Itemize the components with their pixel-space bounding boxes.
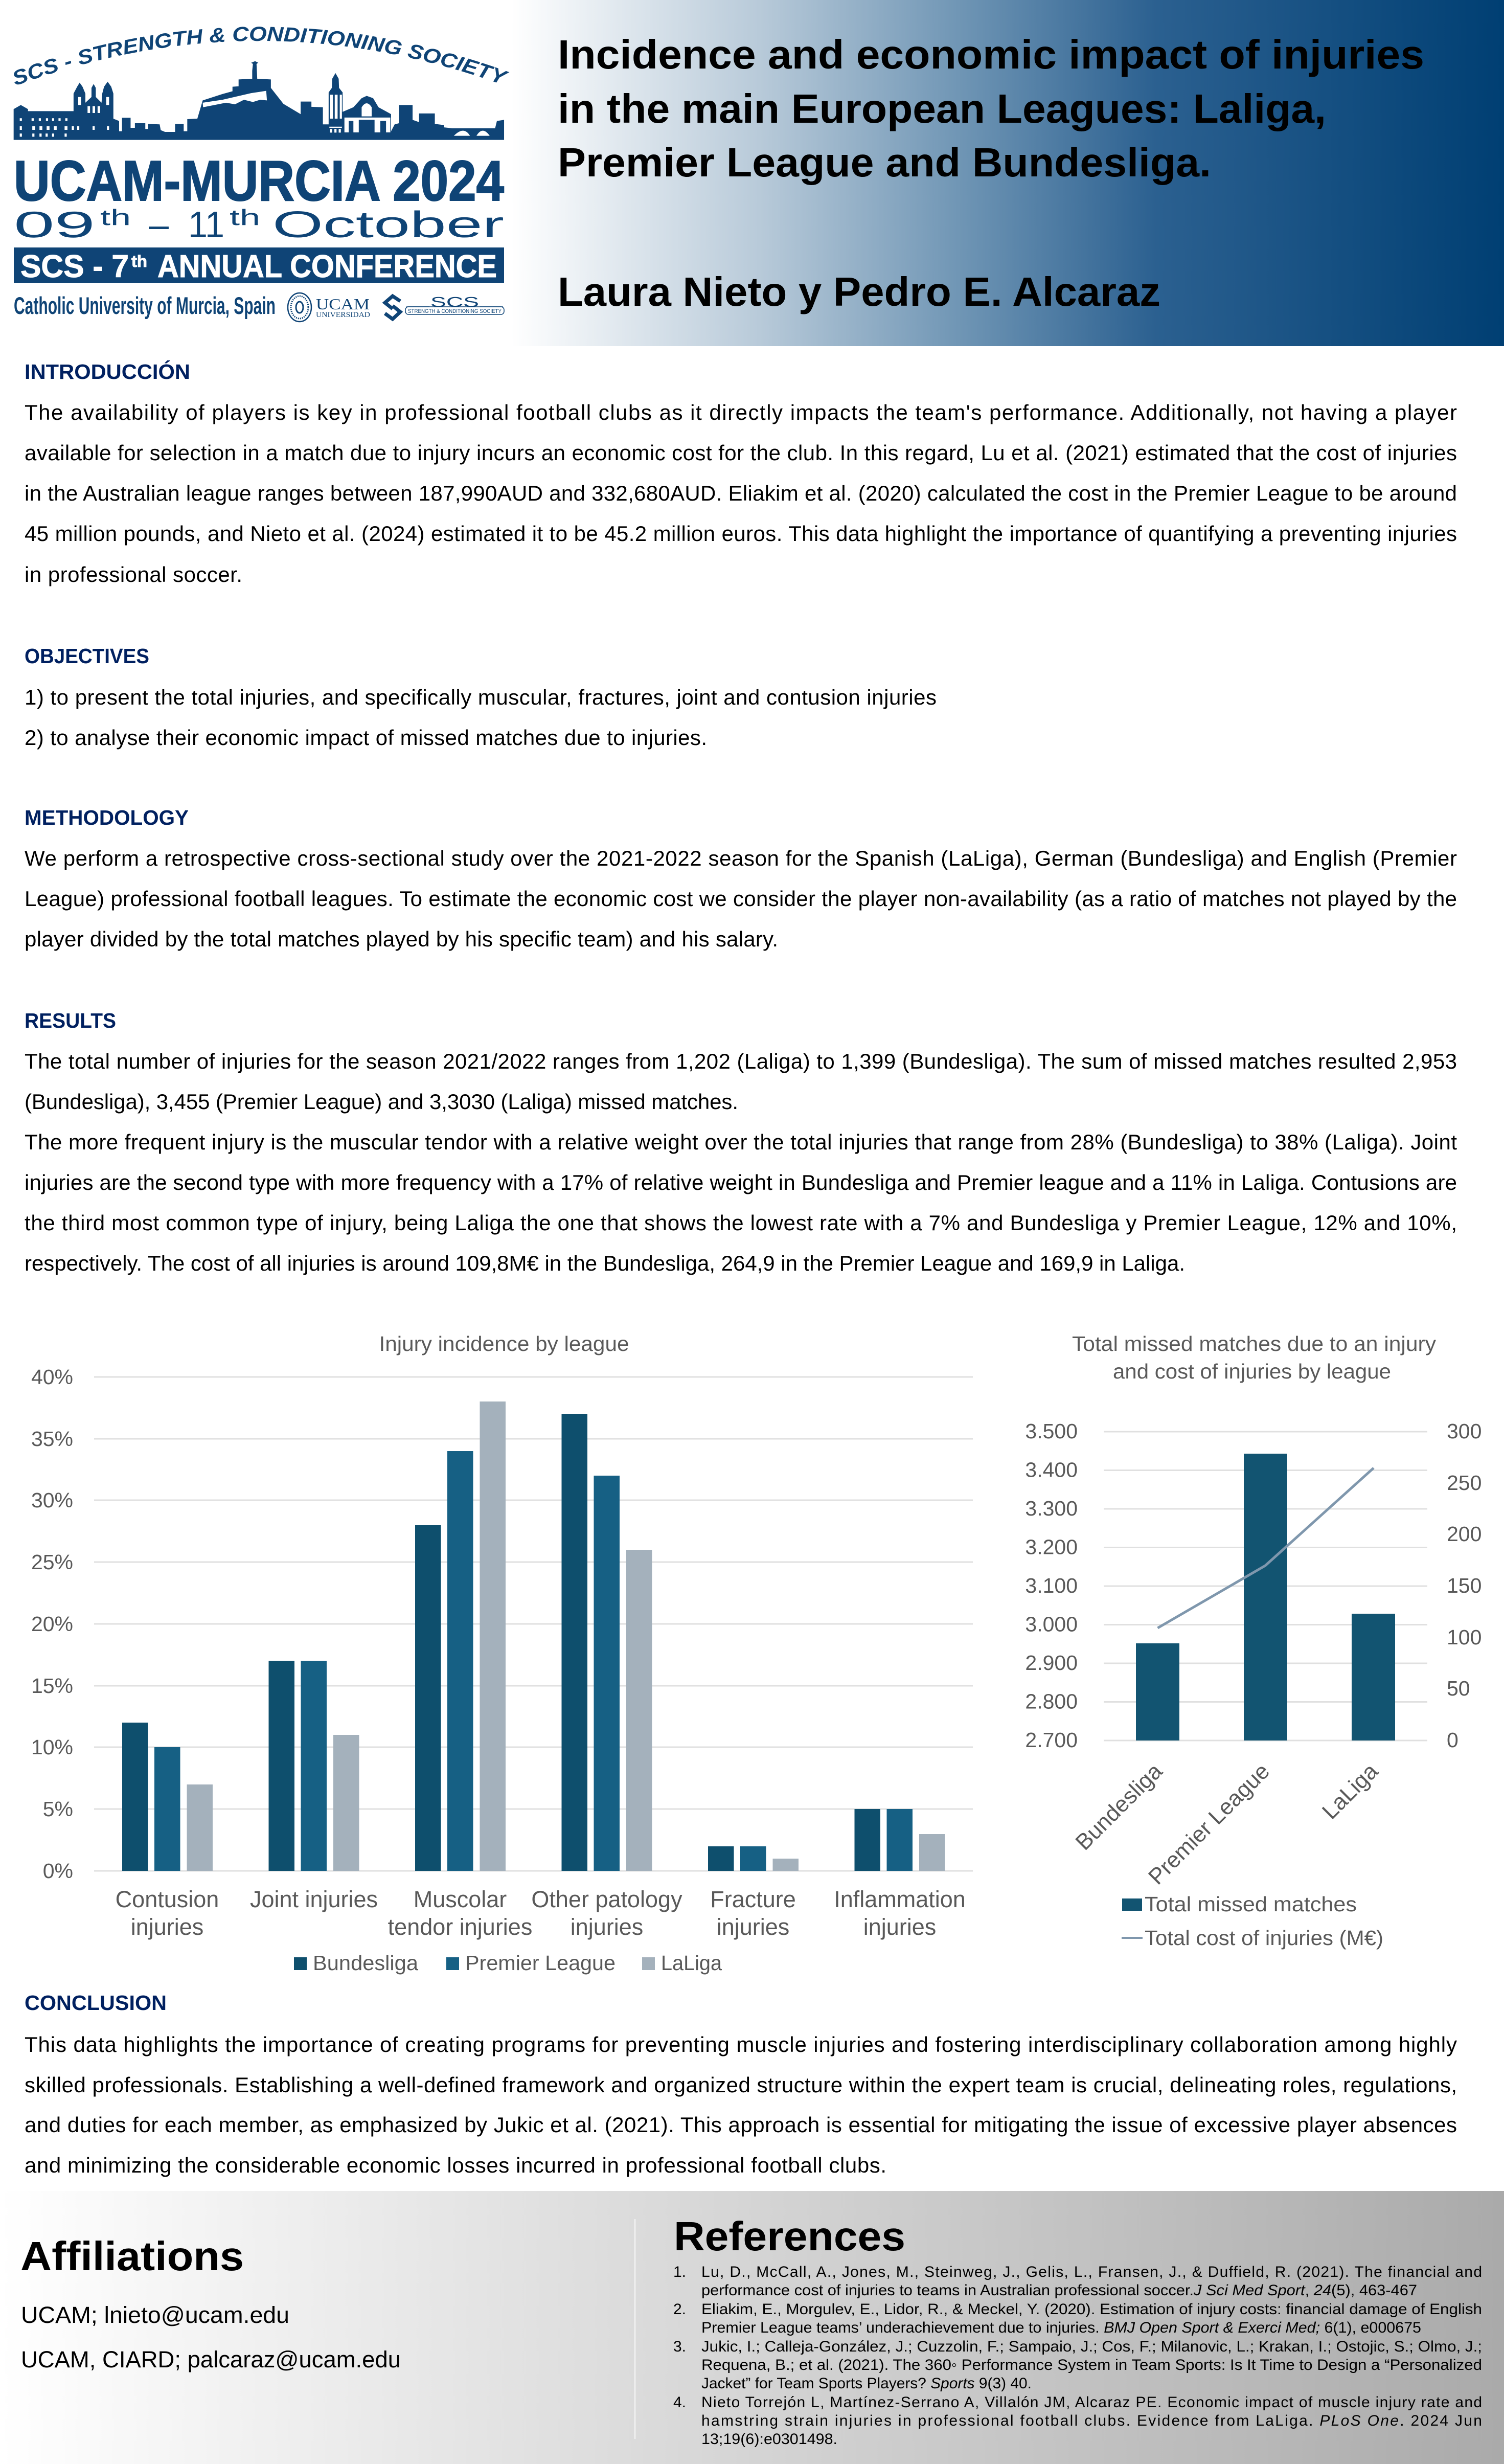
methodology text: player divided by the total matches played by his specific team) and his salary. (25, 927, 778, 951)
left axis labels: 3.300 (1025, 1497, 1078, 1520)
panel: methodology (25, 806, 1457, 951)
legend: Premier League (465, 1951, 616, 1975)
panel: introduction (25, 360, 1457, 586)
heading: methodology: METHODOLOGY (25, 806, 189, 829)
reference 4: 13;19(6):e0301498. (701, 2431, 837, 2448)
left axis labels (1025, 1419, 1078, 1752)
results text: the third most common type of injury, being Laliga the one that shows the lowest rate with a 7% and Bundesliga y Premier League, 12% and 10%, (25, 1211, 1457, 1235)
right axis labels: 300 (1447, 1419, 1482, 1443)
y axis labels: 5% (43, 1797, 73, 1821)
reference 4: 4. (673, 2394, 686, 2411)
reference 1: Lu, D., McCall, A., Jones, M., Steinweg, J., Gelis, L., Fransen, J., & Duffield, R. (2021). The financial and (701, 2264, 1482, 2280)
authors: Laura Nieto y Pedro E. Alcaraz (558, 269, 1160, 314)
y axis labels: 35% (31, 1427, 73, 1451)
introduction text: 45 million pounds, and Nieto et al. (2024) estimated it to be 45.2 million euros. This data highlight the importance of quantifying a preventing injuries (25, 522, 1457, 546)
right axis labels: 50 (1447, 1677, 1470, 1700)
bars: total missed matches (1136, 1454, 1395, 1740)
logo dates: th (100, 205, 131, 230)
UCAM wordmark: UCAM (316, 295, 370, 313)
introduction text (25, 400, 1457, 586)
y axis labels: 25% (31, 1550, 73, 1574)
rotated x axis labels: Bundesliga (1070, 1758, 1167, 1855)
logo dates (14, 205, 504, 245)
left axis labels: 3.400 (1025, 1458, 1078, 1482)
results text: (Bundesliga), 3,455 (Premier League) and 3,3030 (Laliga) missed matches. (25, 1090, 738, 1114)
icon: Murcia skyline (14, 61, 504, 140)
legend (294, 1951, 722, 1975)
y axis labels: 20% (31, 1612, 73, 1636)
logo conference band: th (131, 252, 147, 270)
legend: Total missed matches (1145, 1892, 1357, 1916)
reference 3 (673, 2338, 1482, 2392)
left axis labels: 3.000 (1025, 1613, 1078, 1636)
legend: Bundesliga (313, 1951, 418, 1975)
right axis labels: 100 (1447, 1625, 1482, 1649)
methodology text: We perform a retrospective cross-sectional study over the 2021-2022 season for the Spanish (LaLiga), German (Bundesliga) and English (Premier (25, 846, 1457, 870)
left axis labels: 2.800 (1025, 1689, 1078, 1713)
affiliations: UCAM; lnieto@ucam.edu (21, 2302, 289, 2328)
conference logo (13, 27, 509, 322)
conclusion text: skilled professionals. Establishing a well-defined framework and organized structure within the expert team is crucial, delineating roles, regulations, (25, 2073, 1457, 2097)
logo venue: Catholic University of Murcia, Spain (14, 292, 276, 319)
results text: The total number of injuries for the season 2021/2022 ranges from 1,202 (Laliga) to 1,399 (Bundesliga). The sum of missed matches resulted 2,953 (25, 1049, 1457, 1073)
x axis labels: tendor injuries (388, 1914, 532, 1940)
combo chart: missed matches and cost (1025, 1332, 1482, 1950)
icon: UCAM seal (288, 293, 311, 322)
logo dates: th (230, 205, 260, 230)
conclusion text: This data highlights the importance of creating programs for preventing muscle injuries and fostering interdisciplinary collaboration among highly (25, 2032, 1457, 2056)
reference 4: Nieto Torrejón L, Martínez-Serrano A, Villalón JM, Alcaraz PE. Economic impact of muscle injury rate and (701, 2394, 1482, 2411)
references (673, 2213, 1482, 2448)
left axis labels: 3.500 (1025, 1419, 1078, 1443)
reference 3: Requena, B.; et al. (2021). The 360◦ Performance System in Team Sports: Is It Time to Design a “Personalized (701, 2357, 1482, 2373)
left axis labels: 2.700 (1025, 1728, 1078, 1752)
title (558, 32, 1424, 185)
y axis labels (31, 1365, 73, 1883)
heading: introduction: INTRODUCCIÓN (25, 360, 190, 383)
bars: Premier League (154, 1451, 913, 1871)
y axis labels: 15% (31, 1674, 73, 1698)
introduction text: The availability of players is key in professional football clubs as it directly impacts the team's performance. Additionally, not having a player (25, 400, 1457, 424)
reference 2: 2. (673, 2301, 686, 2318)
reference 3: Jukic, I.; Calleja-González, J.; Cuzzolin, F.; Sampaio, J.; Cos, F.; Milanovic, L.; Krakan, I.; Ostojic, S.; Olmo, J.; (701, 2338, 1482, 2355)
logo dates: October (272, 205, 504, 245)
right axis labels: 200 (1447, 1522, 1482, 1546)
logo conference band: ANNUAL CONFERENCE (157, 249, 497, 284)
x axis labels: Fracture (710, 1886, 796, 1912)
chart title (1072, 1332, 1437, 1383)
x axis labels: Other patology (531, 1886, 682, 1912)
SCS wordmark: SCS (430, 294, 479, 310)
logo dates: 09 (14, 205, 95, 245)
x axis labels (116, 1886, 966, 1940)
title: Premier League and Bundesliga. (558, 140, 1211, 185)
reference 2: Premier League teams’ underachievement due to injuries. BMJ Open Sport & Exerci Med; 6(1), e000675 (701, 2319, 1421, 2336)
panel: conclusion (25, 1991, 1457, 2177)
x axis labels: injuries (863, 1914, 936, 1940)
footer panel (0, 2191, 1504, 2464)
chart title: Injury incidence by league (379, 1332, 629, 1355)
logo conference band: SCS - 7 (20, 249, 129, 284)
right axis labels: 250 (1447, 1471, 1482, 1495)
reference 1: performance cost of injuries to teams in Australian professional soccer. J Sci Med Sport, 24(5), 463-467 (701, 2282, 1417, 2299)
UCAM wordmark: UNIVERSIDAD (316, 311, 370, 319)
chart title: and cost of injuries by league (1113, 1360, 1391, 1383)
heading: conclusion: CONCLUSION (25, 1991, 167, 2015)
reference 2: Eliakim, E., Morgulev, E., Lidor, R., & Meckel, Y. (2020). Estimation of injury costs: financial damage of English (701, 2301, 1482, 2318)
introduction text: in professional soccer. (25, 562, 242, 586)
rotated x axis labels: LaLiga (1317, 1758, 1383, 1824)
introduction text: in the Australian league ranges between 187,990AUD and 332,680AUD. Eliakim et al. (2020) calculated the cost in the Premier League to be around (25, 481, 1457, 505)
x axis labels: injuries (131, 1914, 203, 1940)
reference 2 (673, 2301, 1482, 2336)
methodology text: League) professional football leagues. To estimate the economic cost we consider the player non-availability (as a ratio of matches not played by the (25, 887, 1457, 911)
logo title: UCAM-MURCIA 2024 (14, 149, 504, 213)
bar chart: injury incidence by league (31, 1332, 973, 1975)
title: Incidence and economic impact of injuries (558, 32, 1424, 77)
legend: LaLiga (661, 1951, 722, 1975)
introduction text: available for selection in a match due to injury incurs an economic cost for the club. In this regard, Lu et al. (2021) estimated that the cost of injuries (25, 441, 1457, 465)
affiliations (20, 2233, 401, 2372)
legend: Total cost of injuries (M€) (1145, 1926, 1383, 1950)
chart title: Total missed matches due to an injury (1072, 1332, 1437, 1355)
affiliations: Affiliations (20, 2233, 244, 2279)
logo dates: 11 (188, 205, 224, 245)
results text: The more frequent injury is the muscular tendor with a relative weight over the total injuries that range from 28% (Bundesliga) to 38% (Laliga). Joint (25, 1130, 1457, 1154)
panel: objectives (25, 644, 937, 750)
right axis labels: 150 (1447, 1574, 1482, 1597)
heading: results: RESULTS (25, 1009, 116, 1032)
heading: objectives: OBJECTIVES (25, 644, 149, 668)
header banner (13, 0, 1504, 346)
x axis labels: Contusion (116, 1886, 219, 1912)
y axis labels: 0% (43, 1859, 73, 1883)
results text: injuries are the second type with more frequency with a 17% of relative weight in Bundesliga and Premier league and a 11% in Laliga. Contusions are (25, 1170, 1457, 1194)
x axis labels: Joint injuries (250, 1886, 378, 1912)
reference 3: 3. (673, 2338, 686, 2355)
UCAM wordmark (316, 295, 370, 319)
y axis labels: 30% (31, 1488, 73, 1512)
reference 4: hamstring strain injuries in professional football clubs. Evidence from LaLiga. PLoS One. 2024 Jun (701, 2412, 1482, 2429)
y axis labels: 10% (31, 1735, 73, 1759)
affiliations: UCAM, CIARD; palcaraz@ucam.edu (21, 2346, 401, 2372)
right axis labels: 0 (1447, 1728, 1459, 1752)
objectives text: 1) to present the total injuries, and specifically muscular, fractures, joint and contusion injuries (25, 685, 937, 709)
legend (1122, 1892, 1383, 1950)
y axis labels: 40% (31, 1365, 73, 1389)
icon: SCS mark (385, 296, 400, 319)
references heading: References (674, 2213, 905, 2259)
logo dates: – (149, 205, 169, 245)
reference 3: Jacket” for Team Sports Players? Sports 9(3) 40. (701, 2375, 1032, 2392)
SCS wordmark: STRENGTH & CONDITIONING SOCIETY (408, 308, 502, 314)
results text (25, 1049, 1457, 1275)
rotated x axis labels (1070, 1758, 1383, 1889)
panel: results (25, 1009, 1457, 1275)
left axis labels: 3.200 (1025, 1535, 1078, 1558)
results text: respectively. The cost of all injuries is around 109,8M€ in the Bundesliga, 264,9 in the Premier League and 169,9 in Laliga. (25, 1251, 1185, 1275)
right axis labels (1447, 1419, 1482, 1752)
conclusion text (25, 2032, 1457, 2177)
objectives text (25, 685, 937, 750)
left axis labels: 3.100 (1025, 1574, 1078, 1597)
methodology text (25, 846, 1457, 951)
bars: LaLiga (187, 1401, 945, 1871)
rotated x axis labels: Premier League (1144, 1758, 1274, 1889)
left axis labels: 2.900 (1025, 1651, 1078, 1675)
SCS wordmark (405, 294, 504, 314)
reference 1 (673, 2264, 1482, 2299)
x axis labels: injuries (717, 1914, 789, 1940)
reference 4 (673, 2394, 1482, 2448)
bars: Bundesliga (122, 1414, 880, 1871)
title: in the main European Leagues: Laliga, (558, 86, 1326, 131)
logo arc heading: SCS - STRENGTH & CONDITIONING SOCIETY (14, 27, 509, 85)
conclusion text: and minimizing the considerable economic losses incurred in professional football clubs. (25, 2153, 886, 2177)
x axis labels: Inflammation (834, 1886, 966, 1912)
logo conference band (14, 247, 504, 284)
x axis labels: Muscolar (414, 1886, 507, 1912)
objectives text: 2) to analyse their economic impact of missed matches due to injuries. (25, 726, 707, 750)
line: total cost of injuries (1157, 1468, 1374, 1628)
x axis labels: injuries (571, 1914, 643, 1940)
conclusion text: and duties for each member, as emphasized by Jukic et al. (2021). This approach is essential for mitigating the issue of excessive player absences (25, 2113, 1457, 2137)
reference 1: 1. (673, 2264, 686, 2280)
